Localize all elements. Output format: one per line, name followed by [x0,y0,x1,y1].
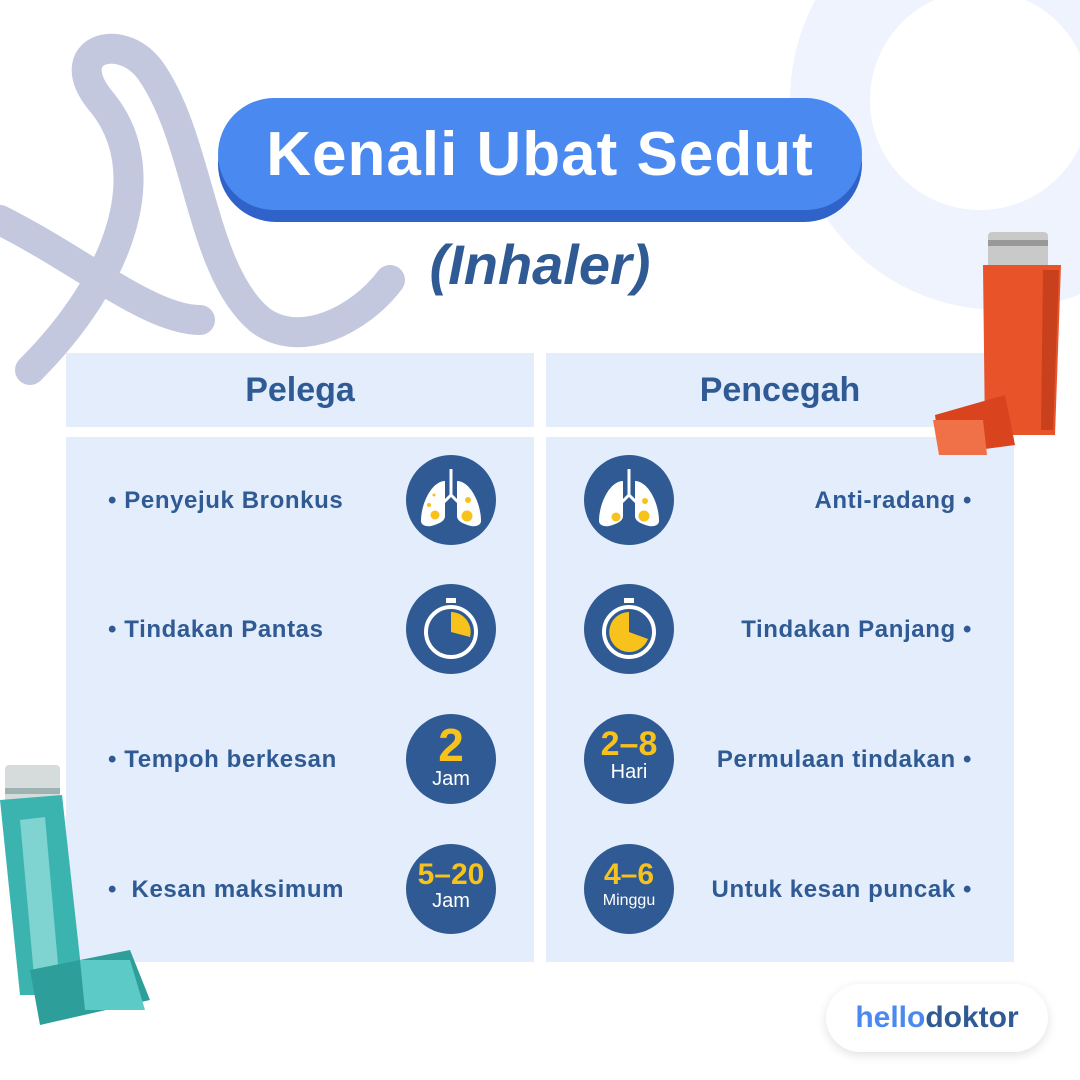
subtitle: (Inhaler) [430,233,650,296]
icon: 5-20 jam [406,844,496,934]
logo: hello [855,1001,925,1034]
icon: 2 jam [406,714,496,804]
ribbon decoration [0,34,405,385]
item: Tindakan Panjang • [741,616,972,643]
icon: 2-8 hari: 2–8 [601,725,657,763]
header: Pelega [66,353,534,427]
icon: stopwatch long [584,584,674,674]
icon: 4-6 minggu [584,844,674,934]
logo: doktor [925,1001,1019,1034]
icon: 5-20 jam: 5–20 [418,858,484,891]
item: • Tempoh berkesan [108,746,337,773]
icon: 4-6 minggu: Minggu [603,892,655,909]
item: • Kesan maksimum [108,876,344,903]
icon: 2 jam: Jam [432,768,470,790]
icon: teal inhaler [0,765,150,1025]
header: Pencegah [546,353,1014,427]
icon: orange inhaler [933,232,1061,455]
icon: 2-8 hari [584,714,674,804]
panel: Pencegah [546,437,1014,962]
icon: lungs [406,455,496,545]
icon: lungs [584,455,674,545]
icon: stopwatch short [406,584,496,674]
header: Pelega: Pelega [245,370,355,408]
icon: 2-8 hari: Hari [611,761,647,783]
logo [826,984,1048,1052]
header: Pencegah: Pencegah [700,370,860,408]
text: Kenali Ubat Sedut [266,120,814,188]
item: Permulaan tindakan • [717,746,972,773]
panel: Pelega [66,437,534,962]
icon: 2 jam: 2 [438,719,464,771]
icon: 4-6 minggu: 4–6 [604,858,654,891]
icon: 5-20 jam: Jam [432,890,470,912]
title pill [218,106,862,222]
item: • Tindakan Pantas [108,616,324,643]
item: Anti-radang • [814,487,972,514]
item: • Penyejuk Bronkus [108,487,343,514]
item: Untuk kesan puncak • [712,876,972,903]
background decorative circle [790,0,1080,310]
